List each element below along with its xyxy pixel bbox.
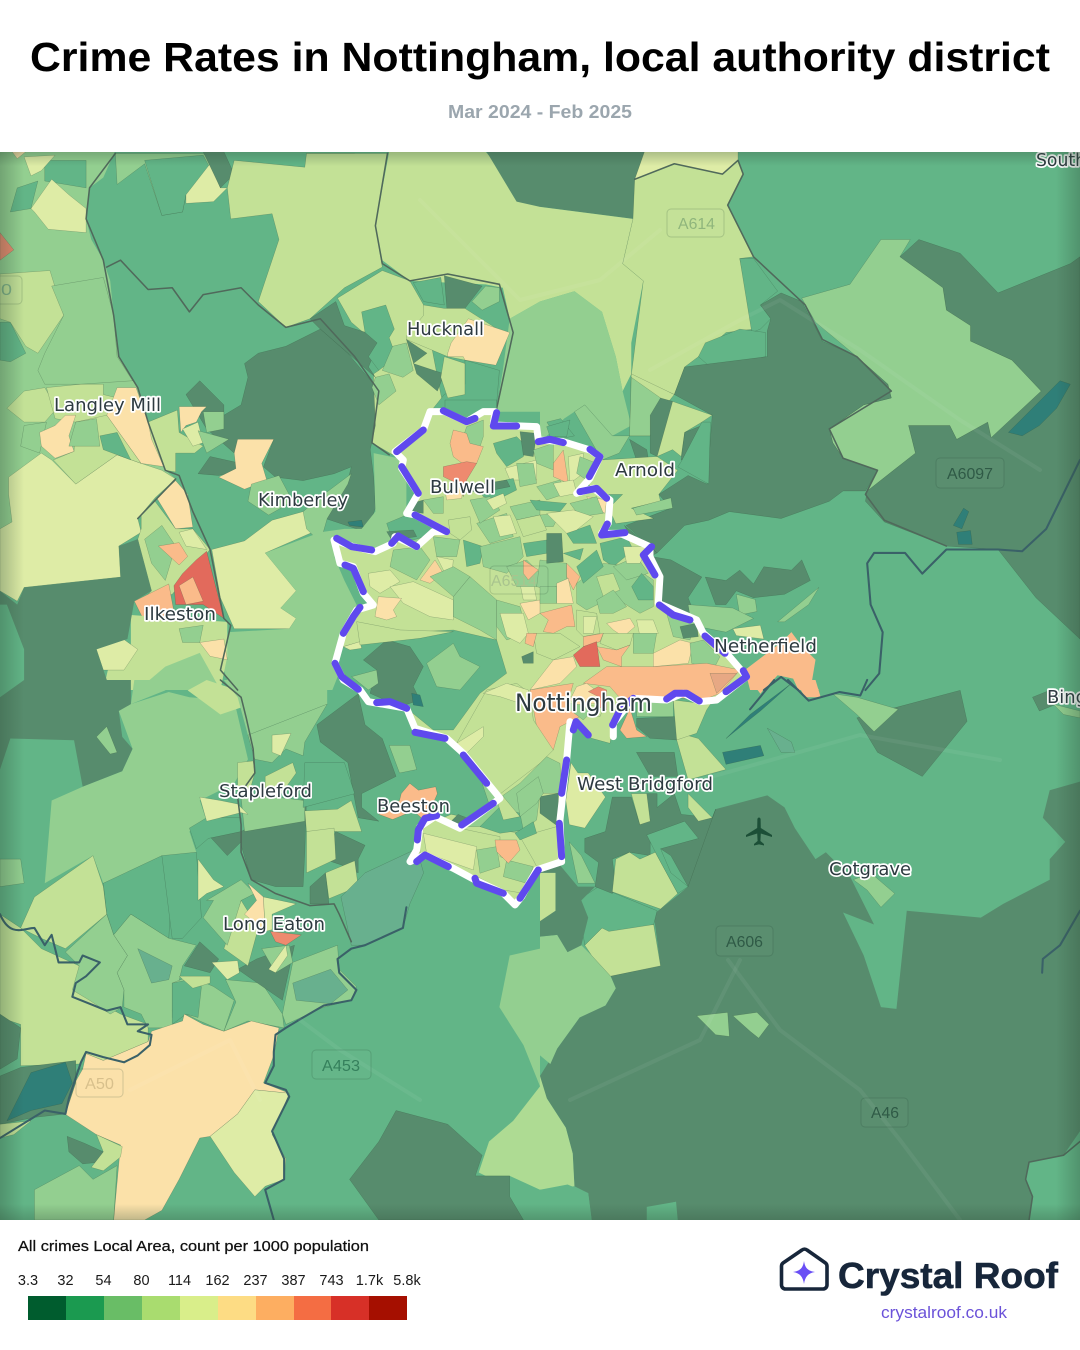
- rivers and boundaries: [0, 153, 1080, 1220]
- map areas: north-west: [0, 150, 540, 690]
- legend scale labels: 162: [205, 1273, 230, 1289]
- road shields: A46: [871, 1105, 899, 1122]
- logo wordmark: Crystal Roof: [838, 1255, 1059, 1296]
- road shields: A50: [85, 1076, 114, 1093]
- legend scale labels: 54: [95, 1273, 112, 1289]
- legend scale labels: 114: [168, 1273, 191, 1289]
- road shields: [0, 209, 1004, 1127]
- place labels: Langley Mill: [54, 395, 161, 416]
- legend scale labels: 743: [319, 1273, 344, 1289]
- legend title: All crimes Local Area, count per 1000 population: [18, 1239, 369, 1255]
- place labels: West Bridgford: [577, 774, 713, 795]
- legend scale labels: 32: [57, 1273, 74, 1289]
- road shields: A453: [322, 1058, 360, 1075]
- faint road network: [298, 298, 1042, 1210]
- place labels: Stapleford: [219, 781, 312, 802]
- legend scale labels: 1.7k: [356, 1273, 384, 1289]
- logo: Crystal Roof: [782, 1249, 1059, 1322]
- panel: choropleth map: [0, 150, 1080, 1220]
- place labels: Nottingham: [515, 689, 652, 717]
- legend: [18, 1239, 421, 1320]
- map edge shading: [0, 152, 1080, 1220]
- place labels: Long Eaton: [223, 914, 325, 935]
- map areas: Nottingham city district: [334, 400, 747, 905]
- road shields: 0: [1, 282, 12, 299]
- place labels: Netherfield: [714, 636, 817, 657]
- map areas: south-west: [0, 680, 540, 1220]
- road shields: A6097: [947, 466, 993, 483]
- website url: crystalroof.co.uk: [881, 1304, 1008, 1322]
- place labels: Ilkeston: [144, 604, 216, 625]
- road shields: A614: [678, 216, 715, 233]
- title: Crime Rates in Nottingham, local authority district: [30, 34, 1050, 80]
- place labels: Bulwell: [430, 477, 495, 498]
- place labels: Cotgrave: [829, 859, 911, 880]
- place labels: Beeston: [377, 796, 450, 817]
- subtitle: date range: Mar 2024 - Feb 2025: [448, 102, 632, 122]
- place labels: Kimberley: [258, 490, 348, 511]
- legend scale labels: [18, 1273, 421, 1289]
- icon: airport: [746, 818, 772, 846]
- legend scale labels: 3.3: [18, 1273, 38, 1289]
- place labels: Hucknall: [407, 319, 484, 340]
- road shields: A6514: [491, 573, 537, 590]
- map areas: north-east: [540, 150, 1080, 690]
- icon: house with star: [782, 1249, 827, 1289]
- place labels: Arnold: [615, 460, 675, 481]
- district boundary: white line with purple dashes: [334, 411, 747, 905]
- legend scale labels: 80: [133, 1273, 150, 1289]
- legend scale labels: 5.8k: [393, 1273, 421, 1289]
- legend colour bar: [28, 1296, 407, 1320]
- road shields: A606: [726, 934, 763, 951]
- legend scale labels: 387: [281, 1273, 306, 1289]
- place labels: [54, 150, 1080, 935]
- map areas: south-east: [540, 680, 1080, 1220]
- legend scale labels: 237: [243, 1273, 268, 1289]
